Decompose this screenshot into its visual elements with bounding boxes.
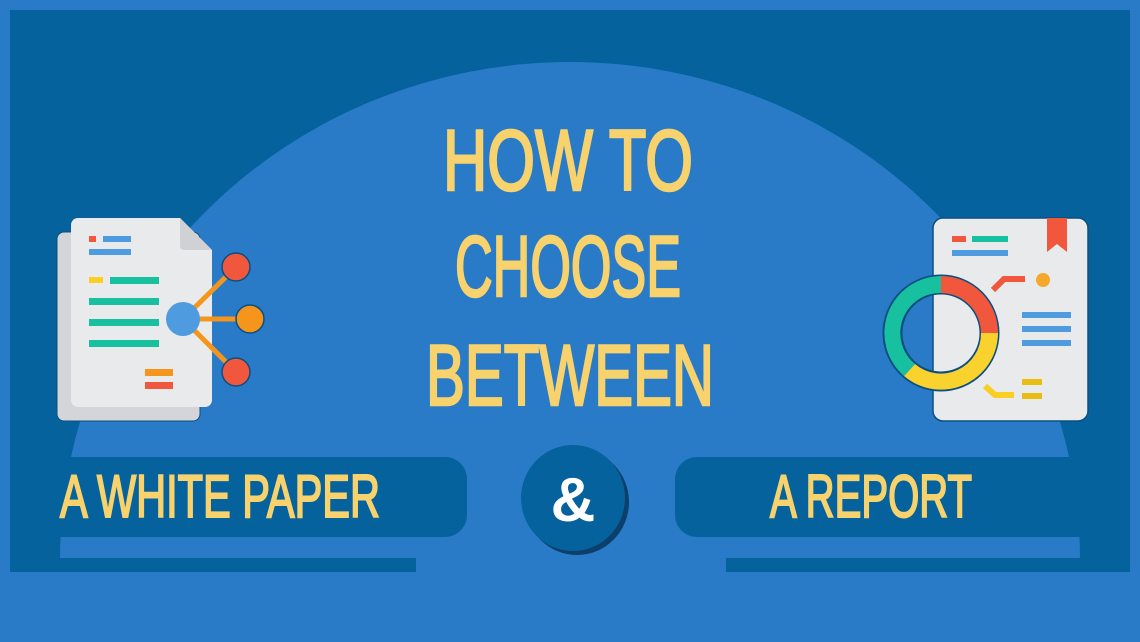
ampersand circle: & <box>551 466 595 535</box>
title: BETWEEN <box>426 328 714 424</box>
title: CHOOSE <box>455 219 681 315</box>
dome <box>60 62 1080 558</box>
title <box>426 113 714 424</box>
icon: report document <box>884 218 1088 421</box>
label: a report: A REPORT <box>770 463 972 530</box>
ampersand circle <box>521 445 629 555</box>
title: HOW TO <box>443 113 693 209</box>
bottom bars <box>416 537 726 577</box>
label: a white paper: A WHITE PAPER <box>60 463 380 530</box>
icon: white paper document <box>57 218 264 421</box>
label: a report <box>675 457 1130 537</box>
donut chart <box>884 276 998 390</box>
